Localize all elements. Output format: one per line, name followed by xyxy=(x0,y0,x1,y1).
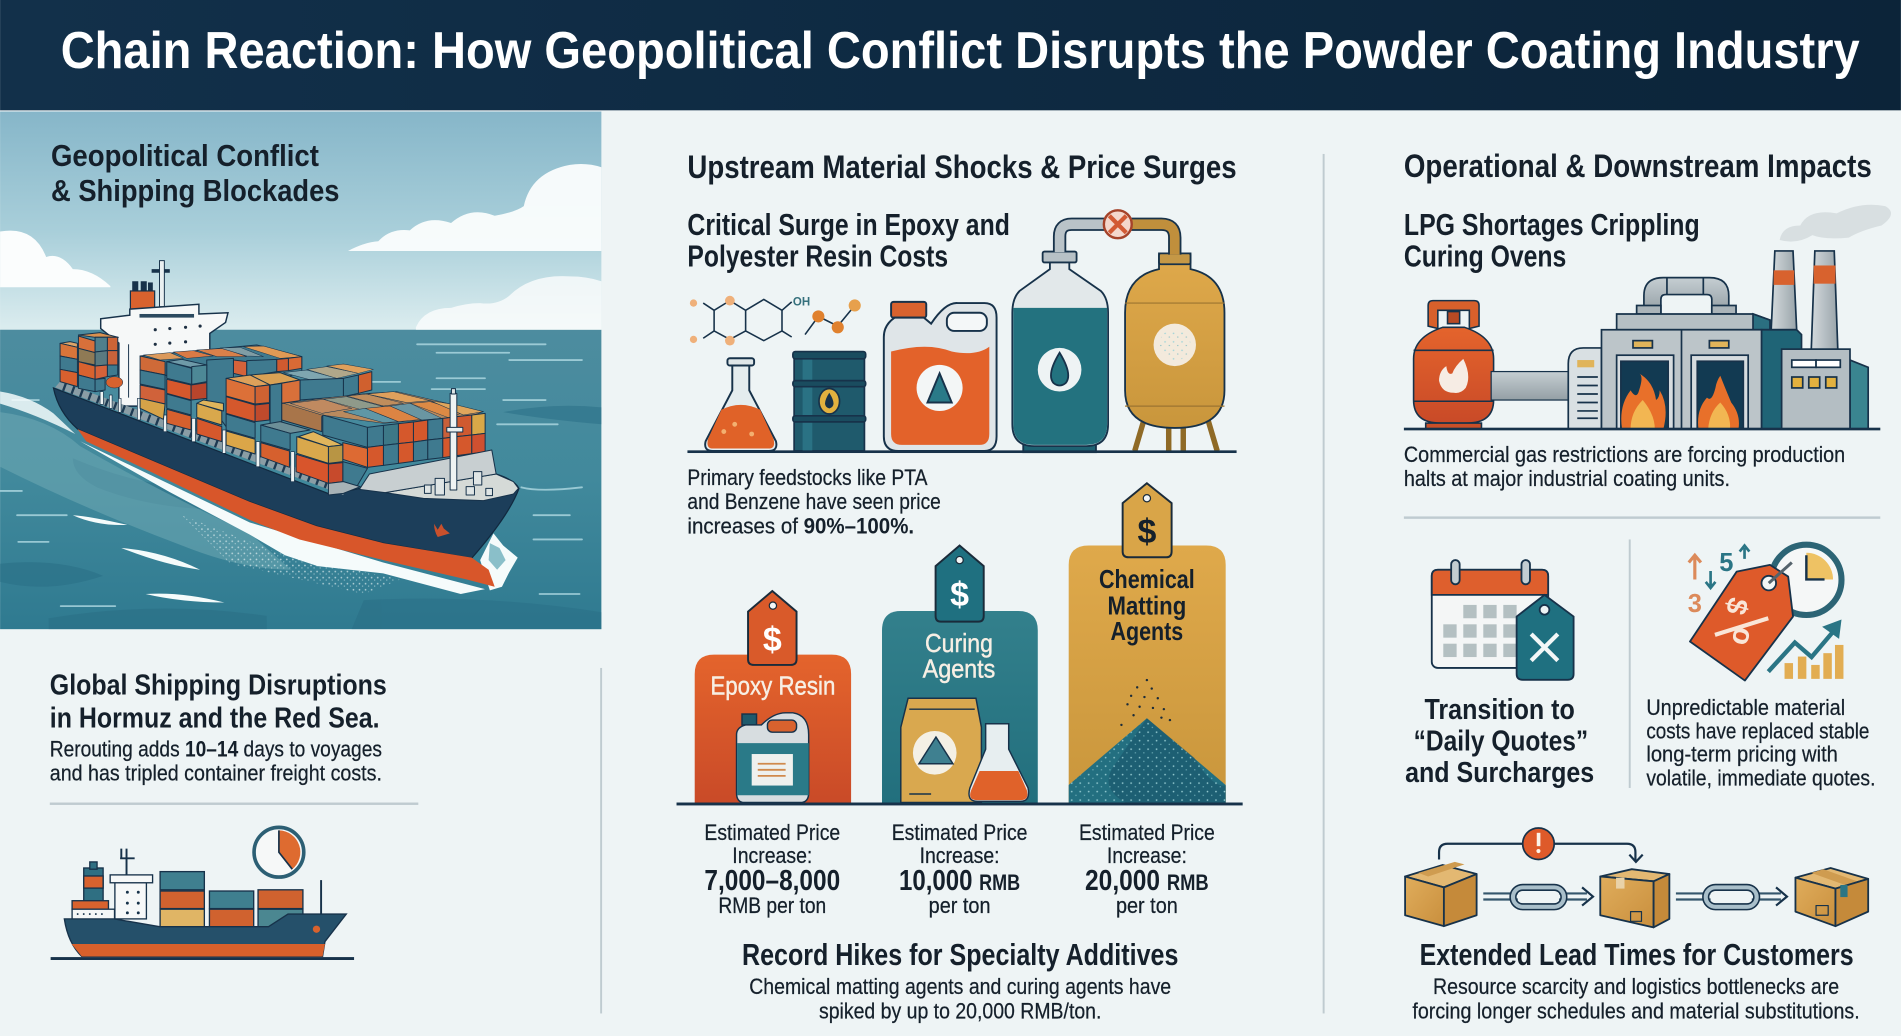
icon: labelled molecule text: OH xyxy=(793,296,810,308)
clouds xyxy=(0,164,601,330)
brown block xyxy=(282,402,350,432)
second column xyxy=(207,358,233,427)
icon: small container ship with clock xyxy=(51,827,354,960)
price label: chemical matting agents: 20,000 RMB xyxy=(1085,865,1209,897)
icon: curing oven factory xyxy=(1568,251,1868,429)
title banner xyxy=(0,0,1901,110)
text block: primary feedstocks: and Benzene have seen price xyxy=(687,489,941,514)
icon: delay connector with warning xyxy=(1439,828,1643,862)
text block: global shipping disruptions: Rerouting adds 10–14 days to voyages xyxy=(50,736,382,761)
heading: geopolitical conflict xyxy=(51,140,340,208)
bar: curing agents xyxy=(882,546,1038,804)
heading: geopolitical conflict: & Shipping Blockades xyxy=(51,175,340,208)
back right block xyxy=(283,370,337,381)
bar: chemical matting agents: Chemical xyxy=(1099,566,1195,594)
text block: extended lead times xyxy=(1412,939,1860,1023)
price label: curing agents: Increase: xyxy=(920,843,1000,868)
text block: record hikes: spiked by up to 20,000 RMB/ton. xyxy=(819,998,1101,1023)
text block: unpredictable material costs xyxy=(1646,695,1875,791)
price label: curing agents: per ton xyxy=(929,893,991,918)
shelf line xyxy=(687,450,1237,453)
bar: chemical matting agents: $ xyxy=(1137,513,1156,551)
bar: epoxy resin xyxy=(695,591,851,804)
sea speckle near hull xyxy=(0,412,400,594)
text block: transition to daily quotes: Transition to xyxy=(1424,694,1575,726)
stern stacks xyxy=(60,342,77,347)
main back block xyxy=(140,345,302,400)
text block: record hikes: Record Hikes for Specialty Additives xyxy=(742,939,1178,972)
bar chart: estimated price increases xyxy=(677,483,1243,805)
text block: extended lead times: Resource scarcity and logistics bottlenecks are xyxy=(1433,974,1839,999)
price label: curing agents: Estimated Price xyxy=(892,820,1027,845)
icon: smoke xyxy=(1780,205,1891,242)
heading: upstream material shocks: Upstream Material Shocks & Price Surges xyxy=(687,148,1237,185)
icon: oil barrel xyxy=(793,352,866,451)
bar: chemical matting agents xyxy=(1069,483,1226,804)
bow emblem xyxy=(434,524,450,537)
price label: epoxy resin: Increase: xyxy=(732,843,812,868)
bar: curing agents: Agents xyxy=(923,656,995,684)
heading: geopolitical conflict: Geopolitical Conflict xyxy=(51,140,319,173)
panel: geopolitical conflict ship illustration xyxy=(0,112,601,629)
price label: epoxy resin: RMB per ton xyxy=(718,893,826,918)
bar: chemical matting agents: Agents xyxy=(1111,618,1183,646)
ship lower hull xyxy=(78,429,495,587)
price label: chemical matting agents: Increase: xyxy=(1107,843,1187,868)
text block: record hikes xyxy=(742,939,1178,1023)
text block: global shipping disruptions: Global Shipping Disruptions xyxy=(50,670,387,702)
text block: commercial gas restrictions: Commercial gas restrictions are forcing production xyxy=(1404,442,1845,467)
icon: volatile price tag with clock: o xyxy=(1725,624,1760,649)
heading: critical surge xyxy=(687,209,1010,274)
bar: chemical matting agents: Matting xyxy=(1107,593,1186,621)
icon: gold tank with legs xyxy=(1125,253,1224,451)
bar: curing agents: Curing xyxy=(925,630,993,658)
price label: curing agents: 10,000 RMB xyxy=(899,865,1020,897)
bar: curing agents: $ xyxy=(950,576,969,614)
text block: commercial gas restrictions: halts at major industrial coating units. xyxy=(1404,466,1730,491)
icon: pipeline with stop valve xyxy=(1060,210,1175,255)
icon: orange jug xyxy=(884,302,997,451)
third column xyxy=(226,375,280,387)
icon: volatile price tag with clock: 5 xyxy=(1719,549,1733,577)
icon: gas pipe xyxy=(1491,372,1569,400)
text block: commercial gas restrictions xyxy=(1404,442,1845,491)
first column xyxy=(140,356,165,375)
text block: primary feedstocks: increases of 90%–100%. xyxy=(687,513,914,538)
text block: primary feedstocks xyxy=(687,465,941,538)
icon: volatile price tag with clock: $ xyxy=(1719,594,1754,618)
icon: oven flames xyxy=(1621,373,1739,429)
factory ground line xyxy=(1404,428,1880,430)
icon: molecule diagram xyxy=(690,296,861,345)
price label: epoxy resin: Estimated Price xyxy=(704,820,840,845)
price label: chemical matting agents: Estimated Price xyxy=(1079,820,1215,845)
icon: flask xyxy=(705,358,776,451)
heading: LPG shortages: LPG Shortages Crippling xyxy=(1404,209,1700,242)
price label: epoxy resin: 7,000–8,000 xyxy=(704,865,840,897)
icon: teal tank xyxy=(1012,252,1108,452)
icon: volatile price tag with clock: 3 xyxy=(1688,590,1702,618)
text block: transition to daily quotes: “Daily Quotes” xyxy=(1414,725,1588,757)
cargo containers and foredeck xyxy=(55,333,518,501)
text block: global shipping disruptions: in Hormuz and the Red Sea. xyxy=(50,702,380,734)
heading: critical surge: Polyester Resin Costs xyxy=(687,241,948,274)
text block: primary feedstocks: Primary feedstocks like PTA xyxy=(687,465,928,490)
text block: transition to daily quotes xyxy=(1405,694,1594,789)
icon: volatile price tag with clock xyxy=(1688,545,1843,681)
bow stack tops xyxy=(283,392,483,423)
text block: global shipping disruptions: and has tripled container freight costs. xyxy=(50,761,382,786)
foredeck xyxy=(385,474,518,501)
text block: global shipping disruptions xyxy=(50,670,387,786)
ship wake xyxy=(0,392,518,602)
icon: LPG cylinder xyxy=(1414,301,1494,429)
bar: epoxy resin: $ xyxy=(763,621,782,659)
price label: epoxy resin xyxy=(704,820,840,918)
heading: LPG shortages xyxy=(1404,209,1700,274)
text block: unpredictable material costs: Unpredictable material xyxy=(1646,695,1845,720)
text block: transition to daily quotes: and Surcharges xyxy=(1405,757,1594,789)
ship bridge xyxy=(101,261,228,406)
bar: epoxy resin: Epoxy Resin xyxy=(710,673,835,701)
icon: chain link two xyxy=(1676,887,1787,907)
ship hull xyxy=(53,388,519,558)
icon: calendar with price tag xyxy=(1432,560,1574,680)
text block: unpredictable material costs: long-term pricing with xyxy=(1646,741,1838,766)
icon: cardboard box two xyxy=(1600,869,1669,927)
dividers xyxy=(50,154,1880,1013)
icon: cardboard box three xyxy=(1795,868,1868,926)
heading: LPG shortages: Curing Ovens xyxy=(1404,241,1566,274)
icon: chain link one xyxy=(1483,887,1593,907)
heading: critical surge: Critical Surge in Epoxy and xyxy=(687,209,1010,242)
price label: chemical matting agents: per ton xyxy=(1116,893,1178,918)
price label: curing agents xyxy=(892,820,1027,918)
icon: cardboard box one xyxy=(1405,862,1477,926)
sea waves xyxy=(0,344,582,606)
text block: record hikes: Chemical matting agents and curing agents have xyxy=(749,974,1171,999)
price label: chemical matting agents xyxy=(1079,820,1215,918)
